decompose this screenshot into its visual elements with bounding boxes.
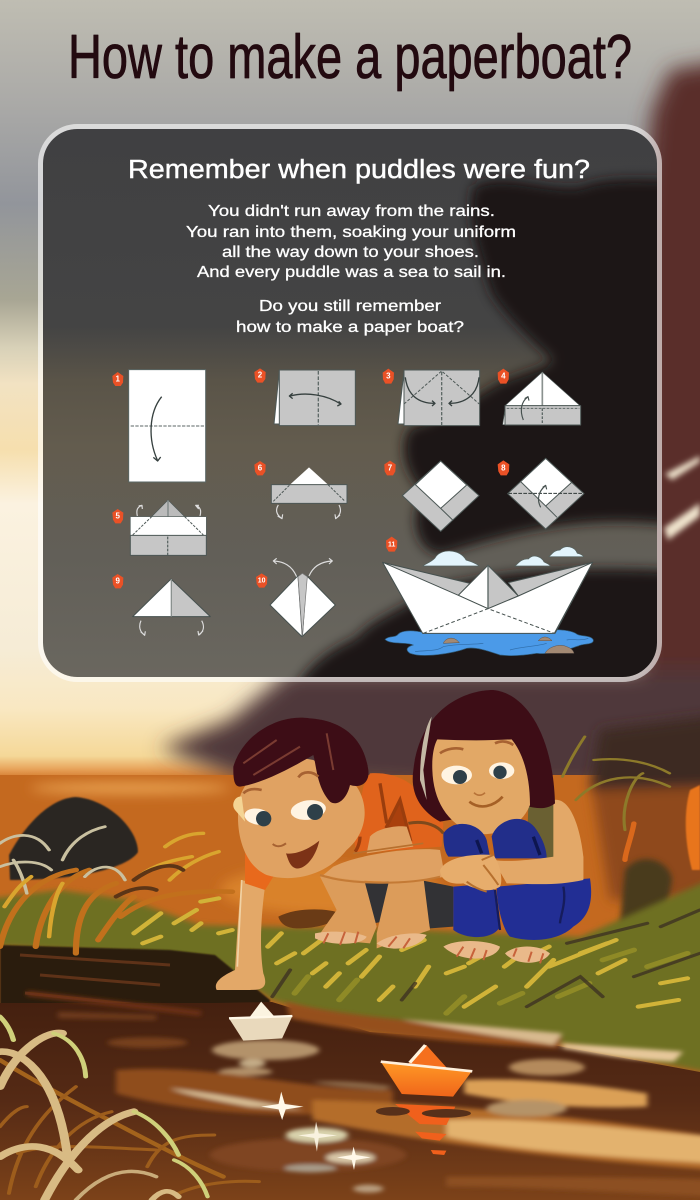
step 11: finished boat with clouds and puddle xyxy=(383,547,593,656)
paper boats in water xyxy=(229,1002,472,1097)
step 3 xyxy=(398,370,480,426)
intro text: all the way down to your shoes. xyxy=(222,244,479,261)
number badges xyxy=(112,368,267,588)
intro text: You didn't run away from the rains. xyxy=(208,203,495,220)
water sparkles xyxy=(261,1092,371,1170)
number badges: 1 xyxy=(115,375,120,384)
number badges: 2 xyxy=(258,371,263,380)
number badges: 4 xyxy=(501,371,506,380)
folding steps, left columns xyxy=(112,368,355,637)
white paper boat xyxy=(229,1002,292,1041)
folding steps, right columns xyxy=(383,369,593,656)
intro text: how to make a paper boat? xyxy=(236,319,464,336)
intro text xyxy=(186,203,516,336)
number badges xyxy=(383,369,509,552)
right dry grass xyxy=(562,737,670,830)
number badges: 6 xyxy=(258,463,263,472)
panel background xyxy=(38,124,662,682)
number badges: 3 xyxy=(386,371,391,380)
illustration: two children xyxy=(216,690,591,990)
background: pond water xyxy=(0,993,700,1200)
background: grass bank xyxy=(0,875,700,1075)
panel: instructions xyxy=(38,124,662,682)
step 1 xyxy=(129,370,206,482)
step 5 xyxy=(130,500,206,555)
puddle xyxy=(385,630,593,656)
panel heading: Remember when puddles were fun? xyxy=(128,156,590,184)
number badges: 10 xyxy=(258,578,266,585)
number badges: 9 xyxy=(115,576,120,585)
clouds xyxy=(423,547,584,566)
intro text: You ran into them, soaking your uniform xyxy=(186,224,516,241)
intro text: And every puddle was a sea to sail in. xyxy=(197,264,506,281)
step 2 xyxy=(274,370,355,426)
number badges: 7 xyxy=(388,463,393,472)
orange reflection xyxy=(395,1104,455,1155)
girl xyxy=(323,690,591,963)
grass strokes and left reeds xyxy=(0,737,700,1013)
foreground reeds xyxy=(0,1017,259,1200)
dark mud bank xyxy=(0,945,270,1012)
number badges: 11 xyxy=(388,542,395,549)
step 9 xyxy=(133,579,210,635)
step 4 xyxy=(503,372,581,425)
number badges: 5 xyxy=(115,511,120,520)
step 7 xyxy=(402,461,479,531)
number badges: 8 xyxy=(501,463,506,472)
orange paper boat xyxy=(381,1045,472,1097)
boy xyxy=(216,718,453,990)
step 10 xyxy=(270,558,335,637)
step 6 xyxy=(271,467,347,519)
dark bush xyxy=(9,797,138,880)
background: field xyxy=(0,710,700,925)
step 8 xyxy=(508,458,584,529)
boat body xyxy=(383,562,470,633)
intro text: Do you still remember xyxy=(259,298,442,315)
